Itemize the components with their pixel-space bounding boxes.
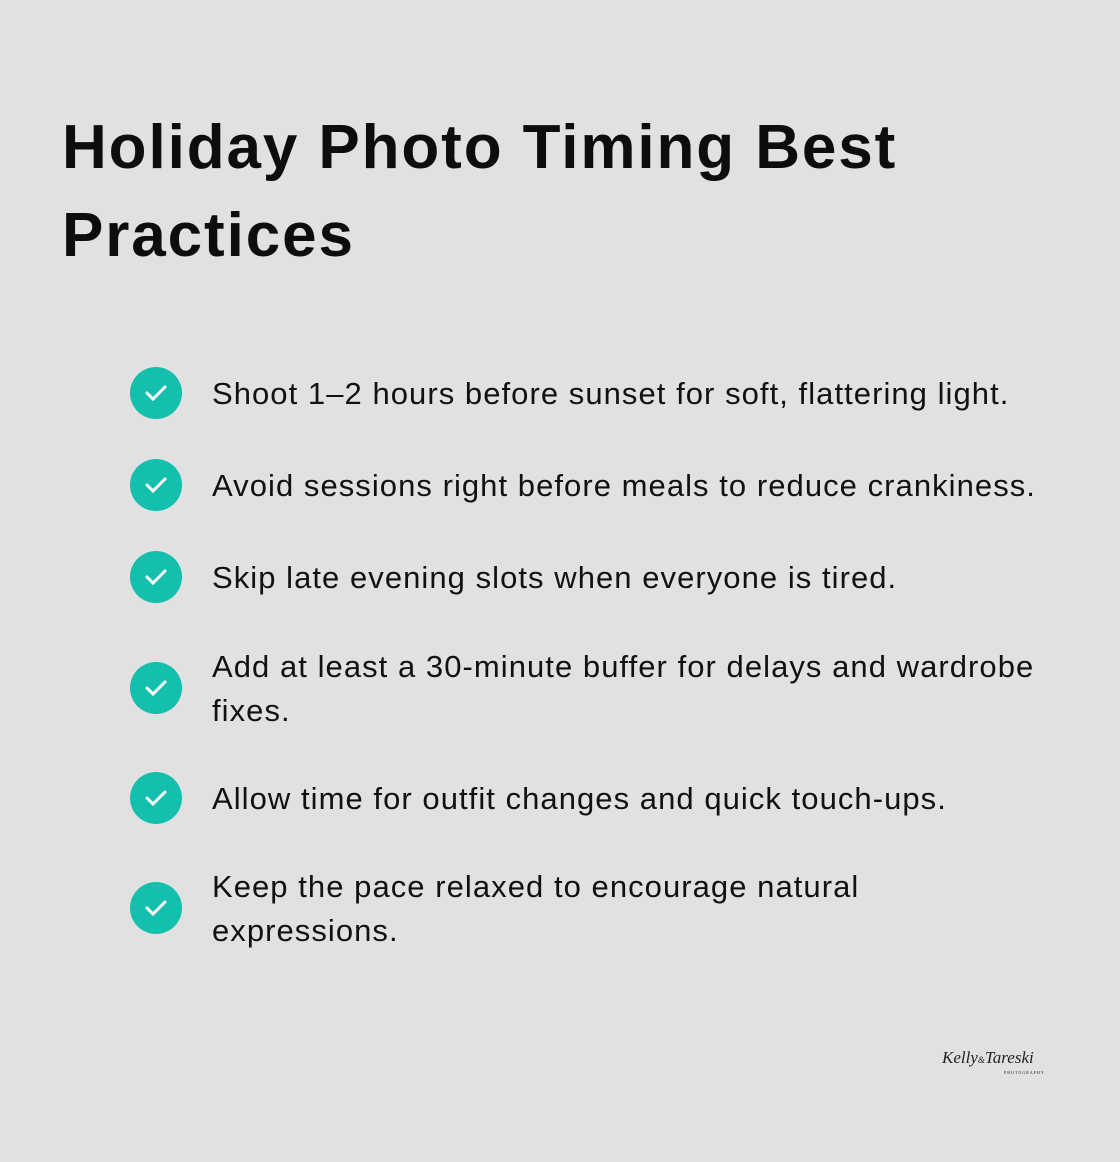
title: Practices (62, 201, 355, 270)
item 4: Add at least a 30-minute buffer for delays and wardrobe (212, 649, 1034, 684)
logo: PHOTOGRAPHY (1004, 1070, 1045, 1075)
item 2 (130, 459, 1036, 511)
title (62, 113, 897, 270)
item 6: expressions. (212, 913, 399, 948)
item 6: Keep the pace relaxed to encourage natural (212, 869, 859, 904)
item 2: Avoid sessions right before meals to reduce crankiness. (212, 468, 1036, 503)
icon: check (130, 367, 182, 419)
item 3: Skip late evening slots when everyone is tired. (212, 560, 897, 595)
icon: check (130, 772, 182, 824)
icon: check (130, 459, 182, 511)
item 1 (130, 367, 1009, 419)
item 1: Shoot 1–2 hours before sunset for soft, flattering light. (212, 376, 1009, 411)
item 5 (130, 772, 947, 824)
icon: check (130, 882, 182, 934)
item 6 (130, 869, 859, 948)
logo: Kelly&Tareski (942, 1048, 1034, 1067)
icon: check (130, 551, 182, 603)
item 4: fixes. (212, 693, 291, 728)
title: Holiday Photo Timing Best (62, 113, 897, 182)
item 3 (130, 551, 897, 603)
icon: check (130, 662, 182, 714)
logo (942, 1048, 1045, 1075)
item 5: Allow time for outfit changes and quick touch-ups. (212, 781, 947, 816)
item 4 (130, 649, 1034, 728)
